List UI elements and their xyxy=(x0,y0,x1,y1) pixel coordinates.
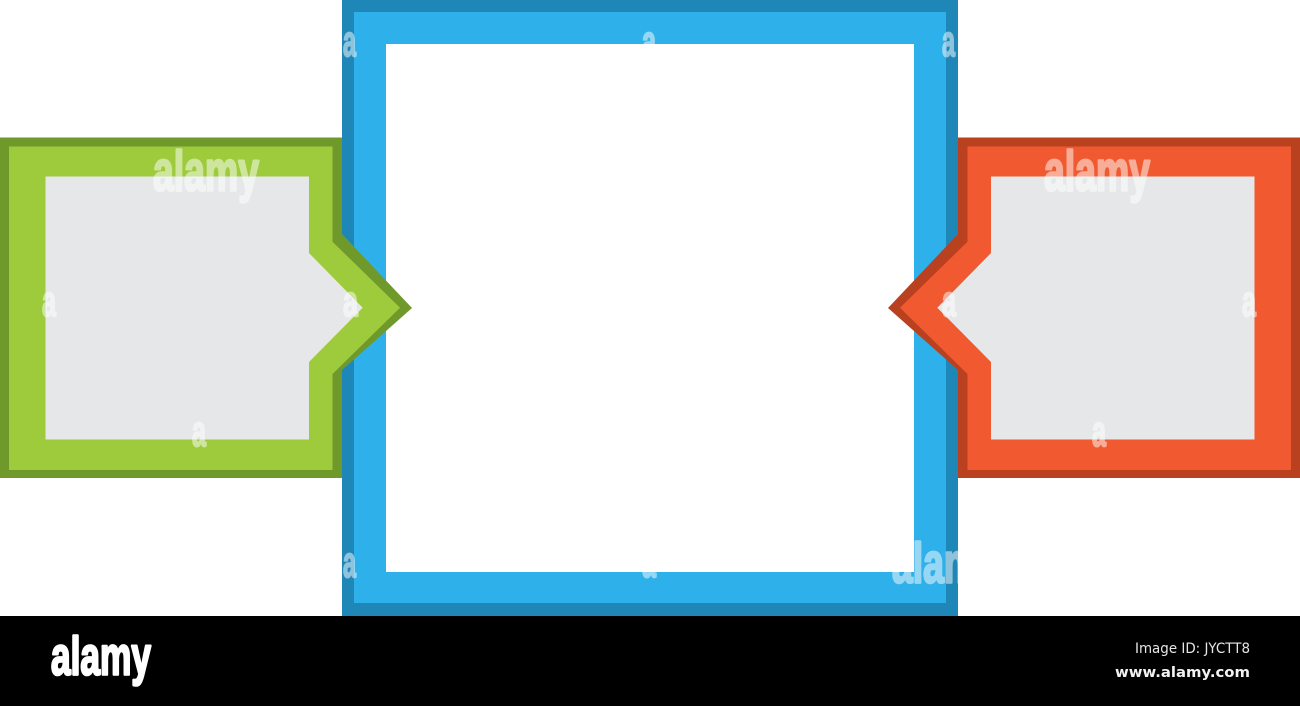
watermark overlays: a xyxy=(42,277,56,326)
watermark overlays on orange box xyxy=(942,140,1256,456)
watermark overlays: a xyxy=(343,17,356,66)
watermark overlays: a xyxy=(642,17,656,66)
watermark overlays: alamy xyxy=(153,140,259,204)
watermark overlays: a xyxy=(343,277,358,326)
footer logo: alamy xyxy=(51,626,151,686)
watermark overlays: alamy xyxy=(892,532,998,596)
website url: www.alamy.com xyxy=(1115,665,1250,681)
footer bar xyxy=(0,616,1300,706)
watermark overlays: a xyxy=(942,17,955,66)
watermark overlays on orange box: a xyxy=(942,277,956,326)
watermark overlays on orange box: a xyxy=(1242,277,1256,326)
panel: central blue frame xyxy=(342,0,958,616)
panel: right orange arrow box xyxy=(888,138,1300,478)
watermark overlays: a xyxy=(343,538,356,587)
watermark overlays on orange box: alamy xyxy=(1044,140,1150,204)
watermark overlays xyxy=(42,17,998,596)
watermark overlays: a xyxy=(192,407,206,456)
watermark overlays on orange box: a xyxy=(1092,407,1106,456)
image id: Image ID: JYCTT8 xyxy=(1135,641,1250,657)
watermark overlays: a xyxy=(642,538,656,587)
panel: left green arrow box xyxy=(0,138,412,478)
